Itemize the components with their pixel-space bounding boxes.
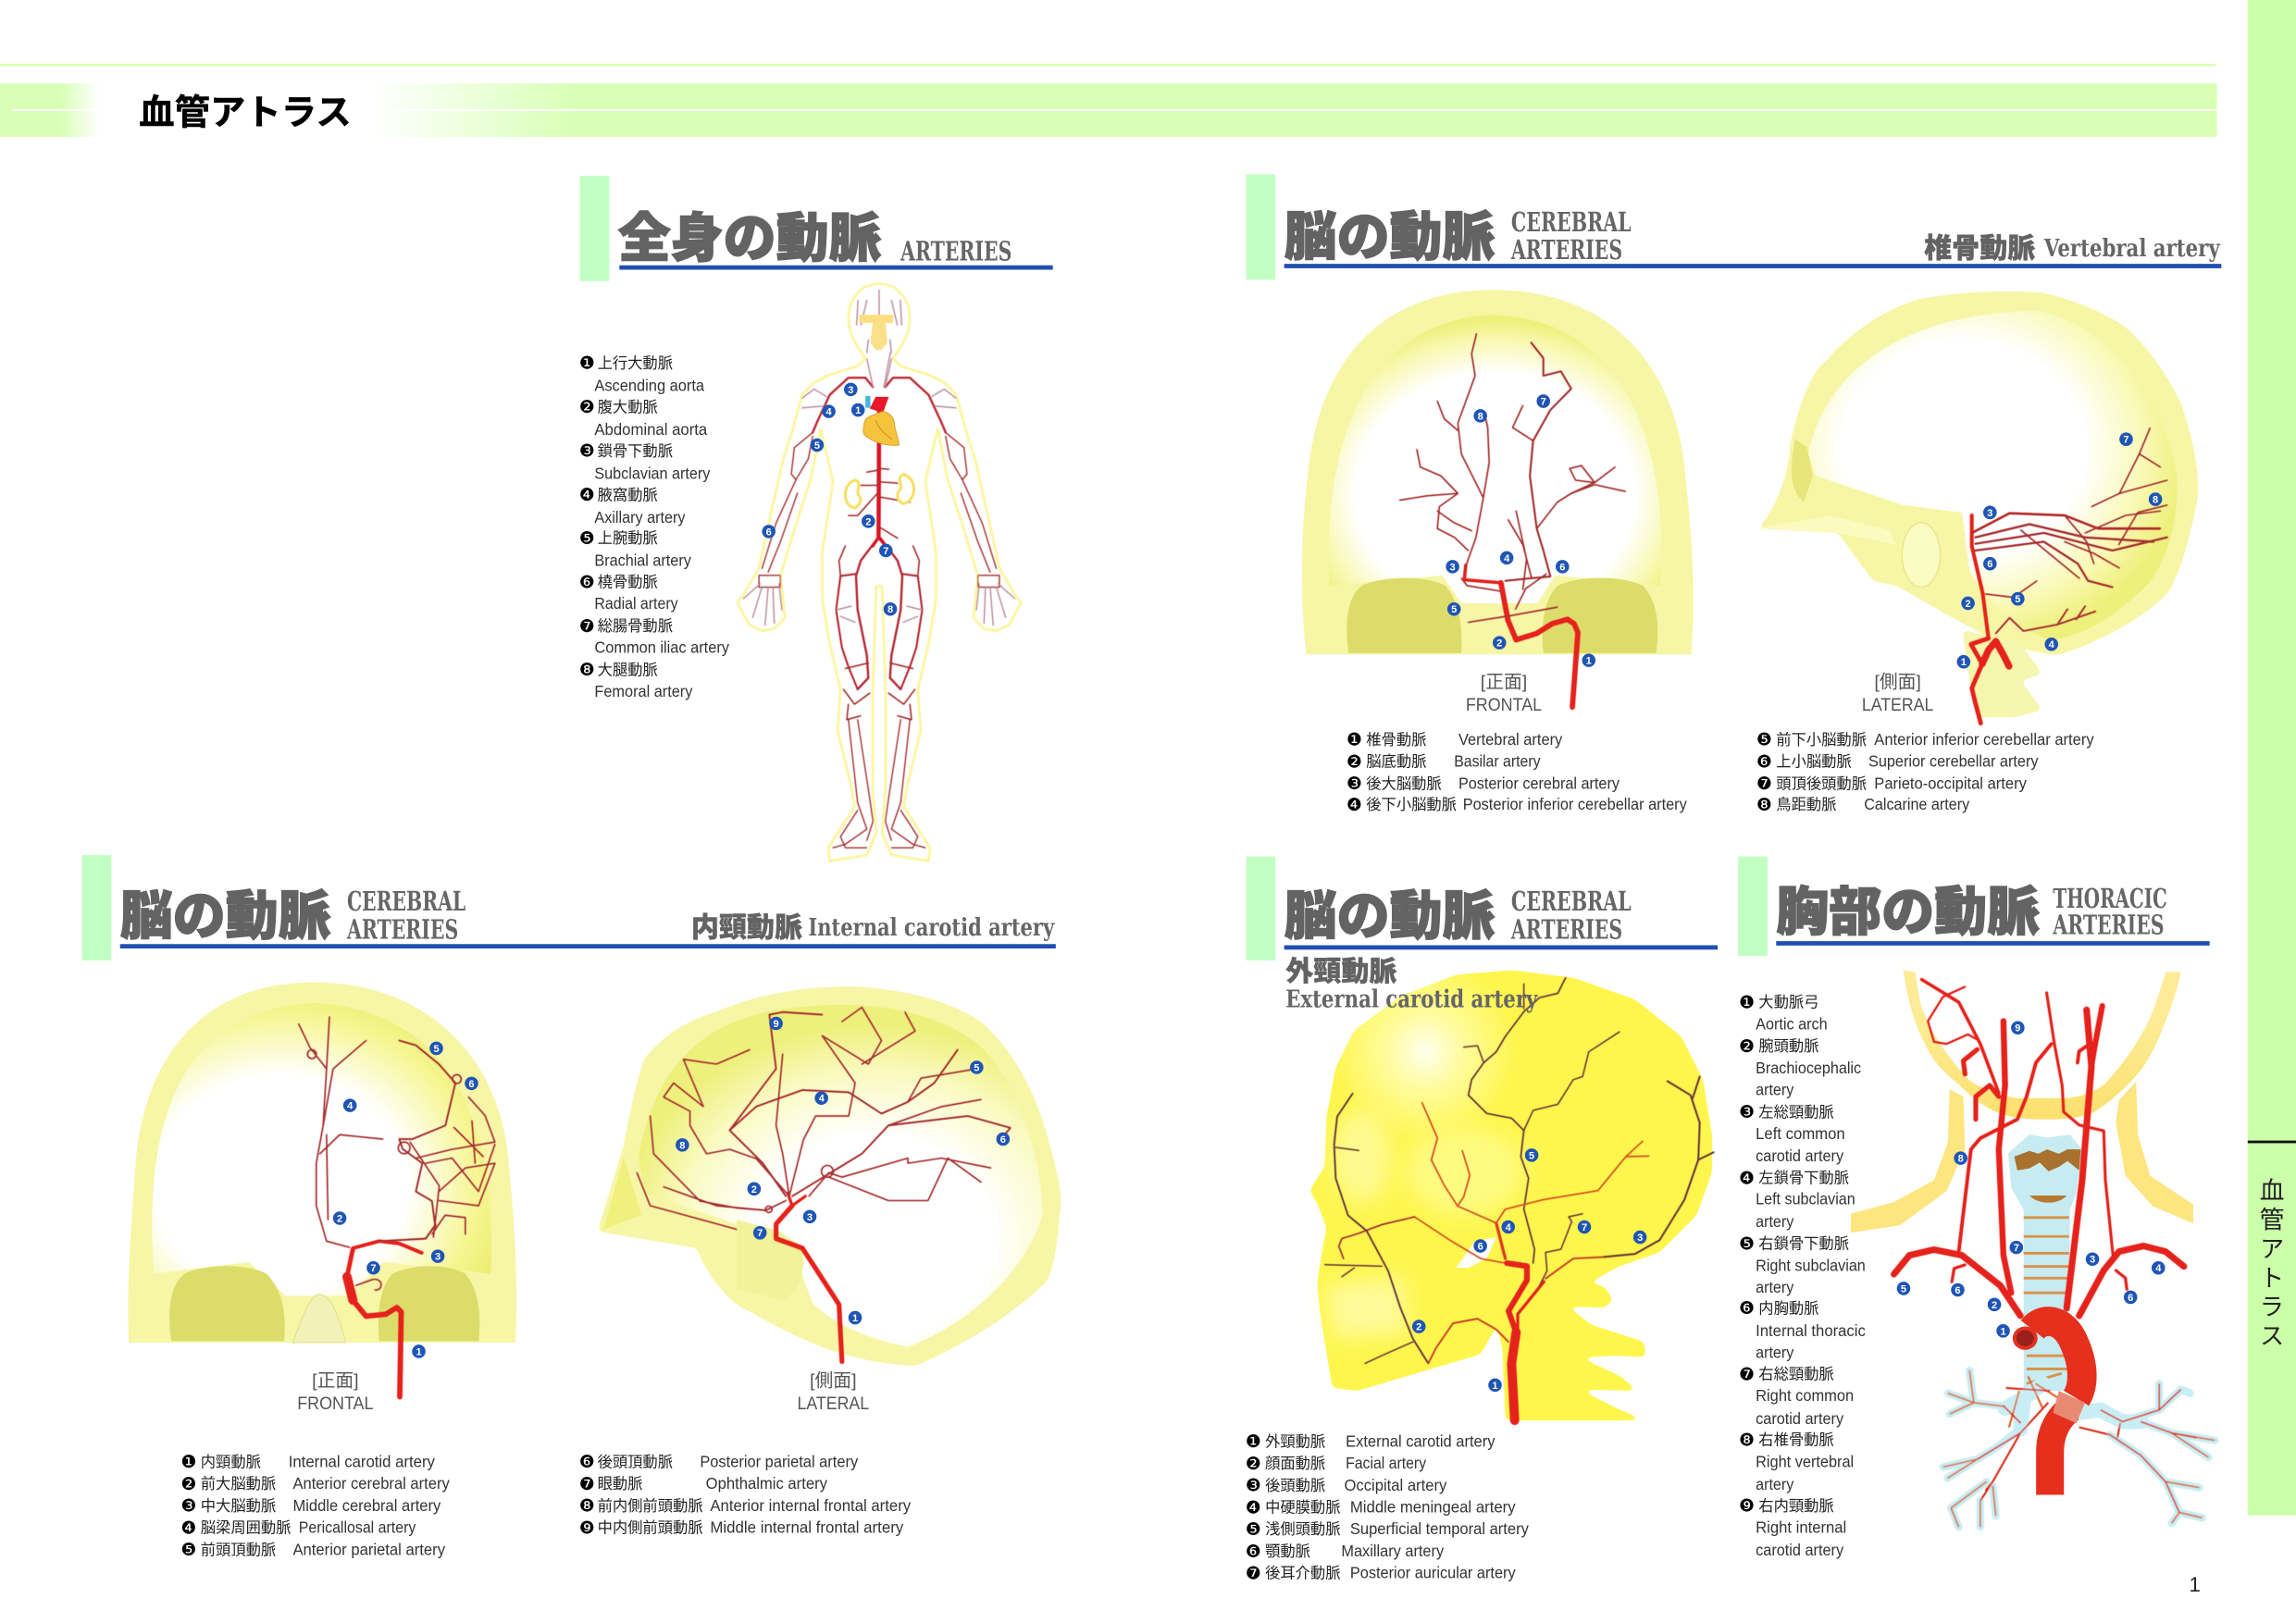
number markers: 5 bbox=[974, 1062, 979, 1073]
side tab label: 血管アトラス bbox=[2256, 1177, 2284, 1352]
legend bbox=[579, 353, 729, 700]
legend: Right subclavian bbox=[1756, 1256, 1866, 1274]
legend: 右内頸動脈 bbox=[1758, 1498, 1834, 1515]
number markers: 8 bbox=[887, 604, 893, 615]
legend: ❹ bbox=[1347, 795, 1362, 815]
legend: 椎骨動脈 bbox=[1366, 732, 1426, 749]
legend: Right vertebral bbox=[1756, 1452, 1854, 1470]
number markers: 2 bbox=[1416, 1322, 1421, 1333]
number markers: 3 bbox=[1987, 508, 1992, 519]
legend: 眼動脈 bbox=[598, 1476, 642, 1493]
legend: Calcarine artery bbox=[1864, 795, 1969, 813]
title: 血管アトラス bbox=[139, 94, 352, 133]
bronchial tree bbox=[1943, 1370, 2215, 1527]
legend: 後頭頂動脈 bbox=[598, 1454, 673, 1470]
legend: 後頭動脈 bbox=[1265, 1478, 1325, 1494]
legend: Anterior inferior cerebellar artery bbox=[1874, 730, 2094, 749]
legend: ❸ bbox=[1347, 774, 1362, 794]
heading block: 脳の動脈 bbox=[1285, 207, 1496, 266]
number markers: 5 bbox=[1901, 1283, 1906, 1295]
legend: ❼ bbox=[579, 1474, 595, 1494]
number markers: 5 bbox=[433, 1044, 440, 1055]
legend: ❷ bbox=[1246, 1454, 1261, 1474]
caption: lateral: LATERAL bbox=[1862, 695, 1933, 715]
kidneys bbox=[845, 480, 861, 508]
number markers: 1 bbox=[2000, 1326, 2006, 1337]
caption: frontal: [正面] bbox=[312, 1370, 359, 1391]
heading block: External carotid artery bbox=[1285, 985, 1538, 1014]
legend bbox=[1739, 992, 1866, 1559]
number markers: 4 bbox=[1506, 1222, 1512, 1233]
caption: frontal: FRONTAL bbox=[297, 1394, 373, 1414]
number markers: 5 bbox=[1529, 1150, 1534, 1161]
number markers: 4 bbox=[2049, 639, 2055, 650]
number markers: 2 bbox=[1992, 1300, 1997, 1311]
number markers bbox=[1412, 1148, 1646, 1392]
number markers: 8 bbox=[2153, 495, 2158, 506]
legend: ❺ bbox=[180, 1540, 196, 1560]
lateral skull bbox=[1758, 291, 2198, 724]
legend: artery bbox=[1756, 1081, 1794, 1099]
legend: 上行大動脈 bbox=[598, 355, 673, 372]
legend: 後耳介動脈 bbox=[1265, 1566, 1341, 1582]
legend: 鎖骨下動脈 bbox=[598, 443, 673, 460]
number markers: 8 bbox=[1478, 411, 1483, 422]
legend: Posterior cerebral artery bbox=[1458, 774, 1620, 792]
number markers: 5 bbox=[1451, 604, 1457, 615]
panel: whole body arteries bbox=[579, 176, 1053, 861]
legend: ❺ bbox=[1756, 730, 1772, 750]
legend: ❶ bbox=[1246, 1431, 1261, 1452]
legend: ❺ bbox=[1739, 1233, 1755, 1254]
legend: 後下小脳動脈 bbox=[1366, 797, 1457, 813]
legend: ❽ bbox=[1756, 795, 1772, 815]
number markers: 4 bbox=[819, 1094, 825, 1105]
legend: ❼ bbox=[1756, 774, 1772, 794]
legend: ❼ bbox=[1739, 1364, 1755, 1384]
legend: 総腸骨動脈 bbox=[598, 618, 673, 635]
legend: 左総頸動脈 bbox=[1758, 1104, 1834, 1121]
legend: Anterior internal frontal artery bbox=[710, 1496, 911, 1515]
legend: Occipital artery bbox=[1345, 1476, 1447, 1494]
legend: ❻ bbox=[1246, 1542, 1261, 1562]
legend: ❷ bbox=[180, 1474, 196, 1494]
legend: Posterior inferior cerebellar artery bbox=[1463, 795, 1687, 813]
legend: Posterior parietal artery bbox=[700, 1452, 858, 1470]
legend: 後大脳動脈 bbox=[1366, 775, 1442, 792]
number markers: 4 bbox=[2155, 1263, 2162, 1274]
number markers: 3 bbox=[1637, 1233, 1643, 1244]
heading block: ARTERIES bbox=[1510, 913, 1622, 945]
aortic arch bbox=[2013, 1321, 2085, 1495]
frontal skull bbox=[1302, 290, 1694, 707]
legend: 腋窩動脈 bbox=[598, 487, 658, 503]
number markers: 9 bbox=[2015, 1023, 2020, 1035]
number markers: 6 bbox=[1000, 1134, 1006, 1146]
legend: Radial artery bbox=[594, 594, 678, 613]
heading block: ARTERIES bbox=[900, 236, 1011, 267]
heading block: 内頸動脈 bbox=[691, 913, 802, 944]
legend: ❻ bbox=[1739, 1298, 1755, 1319]
legend: ❷ bbox=[579, 397, 595, 417]
heading block: ARTERIES bbox=[346, 913, 458, 945]
legend: 腕頭動脈 bbox=[1758, 1038, 1818, 1055]
heading block bbox=[1738, 857, 2210, 956]
legend bbox=[180, 1452, 911, 1560]
number markers: 2 bbox=[337, 1213, 342, 1224]
legend: Middle meningeal artery bbox=[1350, 1498, 1516, 1517]
legend: Middle cerebral artery bbox=[292, 1496, 441, 1515]
legend: Anterior parietal artery bbox=[292, 1540, 445, 1558]
heading block bbox=[82, 855, 1056, 960]
lateral skull bbox=[598, 986, 1061, 1366]
heading block: 椎骨動脈 bbox=[1924, 234, 2035, 265]
legend: Internal thoracic bbox=[1756, 1321, 1866, 1340]
legend: Brachiocephalic bbox=[1756, 1059, 1861, 1077]
number markers: 6 bbox=[1559, 562, 1565, 573]
legend: 中大脳動脈 bbox=[201, 1498, 276, 1515]
legend: artery bbox=[1756, 1212, 1794, 1231]
legend: Right internal bbox=[1756, 1518, 1846, 1537]
number markers: 7 bbox=[370, 1263, 377, 1274]
legend: carotid artery bbox=[1756, 1409, 1843, 1428]
legend: ❶ bbox=[579, 353, 595, 374]
arteries bbox=[1894, 980, 2184, 1316]
caption: frontal bbox=[1466, 673, 1542, 715]
panel: cerebral arteries, vertebral bbox=[1247, 174, 2221, 815]
number markers: 1 bbox=[1492, 1381, 1498, 1392]
number markers: 6 bbox=[766, 527, 772, 538]
number markers bbox=[1957, 432, 2162, 668]
number markers bbox=[1897, 1022, 2166, 1338]
legend: Superficial temporal artery bbox=[1350, 1519, 1529, 1538]
legend: Ophthalmic artery bbox=[706, 1474, 827, 1493]
heart bbox=[863, 396, 900, 445]
legend: ❸ bbox=[1739, 1102, 1755, 1122]
legend: 前大脳動脈 bbox=[201, 1476, 276, 1493]
number markers bbox=[676, 1017, 1010, 1324]
skull illustration bbox=[1309, 970, 1714, 1420]
heading block bbox=[1247, 857, 1718, 1014]
legend: ❸ bbox=[579, 441, 595, 462]
legend: 鳥距動脈 bbox=[1776, 797, 1836, 813]
legend: ❻ bbox=[579, 1452, 595, 1472]
legend: Femoral artery bbox=[594, 682, 693, 700]
legend: ❾ bbox=[579, 1518, 595, 1538]
legend: artery bbox=[1756, 1475, 1794, 1493]
legend: ❺ bbox=[579, 528, 595, 549]
legend: Parieto-occipital artery bbox=[1874, 774, 2027, 792]
legend: 前内側前頭動脈 bbox=[598, 1498, 703, 1515]
legend: ❼ bbox=[1246, 1564, 1261, 1584]
legend: ❻ bbox=[1756, 751, 1772, 772]
legend: 脳梁周囲動脈 bbox=[201, 1520, 291, 1537]
number markers bbox=[1446, 394, 1595, 667]
legend: Pericallosal artery bbox=[299, 1518, 416, 1537]
caption: frontal bbox=[297, 1370, 373, 1414]
legend: ❶ bbox=[180, 1452, 196, 1472]
legend: ❸ bbox=[180, 1496, 196, 1517]
legend: ❷ bbox=[1347, 751, 1362, 772]
number markers: 9 bbox=[774, 1019, 779, 1030]
caption: lateral: [側面] bbox=[1874, 673, 1921, 693]
trachea bbox=[2008, 1134, 2082, 1391]
legend: 大動脈弓 bbox=[1758, 995, 1818, 1011]
legend: ❺ bbox=[1246, 1519, 1261, 1540]
header band bbox=[0, 83, 2217, 137]
heading block: Vertebral artery bbox=[2043, 234, 2220, 263]
heading block: 外頸動脈 bbox=[1285, 957, 1396, 987]
legend: 脳底動脈 bbox=[1366, 754, 1426, 771]
legend: Anterior cerebral artery bbox=[292, 1474, 450, 1493]
legend: Aortic arch bbox=[1756, 1014, 1828, 1033]
number markers: 3 bbox=[1450, 562, 1456, 573]
legend: Internal carotid artery bbox=[289, 1452, 435, 1470]
legend: carotid artery bbox=[1756, 1541, 1843, 1559]
caption: frontal: FRONTAL bbox=[1466, 695, 1542, 715]
number markers: 4 bbox=[825, 407, 832, 418]
legend: ❸ bbox=[1246, 1476, 1261, 1496]
legend: carotid artery bbox=[1756, 1146, 1843, 1165]
legend: artery bbox=[1756, 1344, 1794, 1362]
heading block: CEREBRAL bbox=[347, 886, 465, 917]
number markers bbox=[762, 383, 897, 616]
legend: ❾ bbox=[1739, 1496, 1755, 1517]
legend: 内胸動脈 bbox=[1758, 1300, 1818, 1317]
number markers: 7 bbox=[883, 546, 888, 557]
page number: 1 bbox=[2189, 1573, 2201, 1596]
heading block bbox=[580, 176, 1053, 281]
legend: 頭頂後頭動脈 bbox=[1776, 775, 1867, 792]
legend: ❹ bbox=[1246, 1497, 1261, 1518]
heading block: 全身の動脈 bbox=[618, 209, 882, 268]
legend: ❻ bbox=[579, 572, 595, 592]
heading block bbox=[1247, 174, 2221, 279]
number markers: 1 bbox=[855, 405, 861, 416]
number markers: 3 bbox=[807, 1212, 813, 1223]
legend: 外頸動脈 bbox=[1265, 1433, 1325, 1450]
caption: lateral: [側面] bbox=[810, 1370, 857, 1391]
legend: Middle internal frontal artery bbox=[710, 1518, 904, 1537]
legend: 右鎖骨下動脈 bbox=[1758, 1236, 1849, 1253]
legend: 左鎖骨下動脈 bbox=[1758, 1171, 1849, 1187]
number markers: 8 bbox=[1958, 1154, 1964, 1165]
caption: lateral bbox=[798, 1370, 869, 1414]
legend: 橈骨動脈 bbox=[598, 575, 658, 591]
number markers bbox=[333, 1042, 478, 1358]
legend: 浅側頭動脈 bbox=[1265, 1521, 1341, 1538]
legend: Axillary artery bbox=[594, 508, 686, 527]
number markers: 6 bbox=[468, 1079, 475, 1090]
legend: Brachial artery bbox=[594, 551, 691, 570]
number markers: 7 bbox=[1582, 1222, 1587, 1233]
legend: 大腿動脈 bbox=[598, 662, 658, 678]
legend: ❹ bbox=[579, 485, 595, 505]
number markers: 5 bbox=[814, 440, 820, 452]
caption: lateral: LATERAL bbox=[798, 1394, 869, 1414]
heading block: 脳の動脈 bbox=[120, 887, 331, 947]
legend: Common iliac artery bbox=[594, 638, 729, 657]
legend: ❹ bbox=[1739, 1168, 1755, 1188]
number markers: 7 bbox=[1541, 397, 1546, 408]
panel: cerebral arteries, internal carotid bbox=[82, 855, 1061, 1560]
number markers: 4 bbox=[1504, 553, 1510, 564]
legend: 前下小脳動脈 bbox=[1776, 732, 1867, 749]
caption: lateral bbox=[1862, 673, 1933, 715]
legend: Superior cerebellar artery bbox=[1868, 752, 2039, 771]
legend: 右椎骨動脈 bbox=[1758, 1432, 1834, 1449]
number markers: 2 bbox=[751, 1184, 757, 1196]
legend: 上小脳動脈 bbox=[1776, 754, 1852, 771]
number markers: 2 bbox=[865, 516, 871, 527]
caption: frontal: [正面] bbox=[1481, 673, 1527, 693]
number markers: 2 bbox=[1496, 638, 1502, 650]
number markers: 3 bbox=[2090, 1255, 2095, 1266]
number markers: 4 bbox=[347, 1101, 354, 1112]
heading block: THORACIC bbox=[2053, 883, 2167, 914]
legend: 内頸動脈 bbox=[201, 1454, 261, 1470]
legend: ❽ bbox=[579, 1496, 595, 1517]
legend bbox=[1347, 730, 2094, 815]
number markers: 7 bbox=[757, 1228, 763, 1239]
legend: ❷ bbox=[1739, 1036, 1755, 1057]
number markers: 7 bbox=[2014, 1243, 2019, 1254]
legend: 顎動脈 bbox=[1265, 1543, 1310, 1560]
heading block: CEREBRAL bbox=[1511, 206, 1632, 238]
legend: artery bbox=[1756, 1278, 1794, 1296]
legend: Ascending aorta bbox=[594, 376, 704, 394]
heading block: 脳の動脈 bbox=[1285, 887, 1496, 947]
legend: 右総頸動脈 bbox=[1758, 1367, 1834, 1383]
heading block: ARTERIES bbox=[1510, 234, 1622, 266]
number markers: 1 bbox=[1586, 656, 1592, 667]
number markers: 6 bbox=[1987, 559, 1992, 570]
legend: 腹大動脈 bbox=[598, 399, 658, 415]
legend: Left subclavian bbox=[1756, 1189, 1855, 1208]
number markers: 5 bbox=[2015, 594, 2020, 605]
number markers: 6 bbox=[1955, 1285, 1961, 1296]
body illustration bbox=[738, 283, 1021, 861]
legend: Facial artery bbox=[1346, 1454, 1426, 1472]
number markers: 1 bbox=[1961, 657, 1967, 668]
legend: External carotid artery bbox=[1346, 1431, 1496, 1450]
heading block: CEREBRAL bbox=[1511, 886, 1632, 917]
legend: 前頭頂動脈 bbox=[201, 1542, 276, 1558]
number markers: 8 bbox=[679, 1140, 685, 1151]
panel: thoracic arteries bbox=[1738, 857, 2215, 1559]
legend: 中硬膜動脈 bbox=[1265, 1500, 1341, 1517]
number markers: 1 bbox=[416, 1346, 422, 1357]
number markers: 1 bbox=[852, 1313, 858, 1324]
number markers: 6 bbox=[2128, 1293, 2133, 1304]
number markers: 2 bbox=[1965, 599, 1971, 610]
legend: ❽ bbox=[1739, 1431, 1755, 1451]
legend: ❼ bbox=[579, 616, 595, 637]
thoracic illustration bbox=[1851, 970, 2215, 1527]
legend bbox=[1246, 1431, 1529, 1584]
legend: Left common bbox=[1756, 1124, 1845, 1143]
legend: Vertebral artery bbox=[1458, 730, 1563, 749]
legend: 顔面動脈 bbox=[1265, 1456, 1325, 1472]
legend: Maxillary artery bbox=[1341, 1542, 1444, 1560]
number markers: 3 bbox=[848, 385, 853, 396]
legend: ❽ bbox=[579, 660, 595, 680]
legend: ❶ bbox=[1347, 730, 1362, 750]
legend: ❹ bbox=[180, 1518, 196, 1538]
heading block: ARTERIES bbox=[2053, 910, 2165, 941]
legend: 中内側前頭動脈 bbox=[598, 1520, 703, 1537]
number markers: 7 bbox=[2123, 435, 2129, 446]
side tab bbox=[2248, 0, 2296, 1516]
clavicle bands bbox=[1851, 970, 2193, 1233]
legend: ❶ bbox=[1739, 992, 1755, 1012]
legend: 上腕動脈 bbox=[598, 530, 658, 547]
heading block: Internal carotid artery bbox=[808, 913, 1055, 942]
header line bbox=[0, 64, 2215, 66]
legend: Subclavian artery bbox=[594, 464, 711, 482]
heading block: 胸部の動脈 bbox=[1776, 883, 2040, 942]
number markers: 6 bbox=[1478, 1241, 1483, 1252]
number markers: 3 bbox=[435, 1252, 441, 1263]
panel: cerebral arteries, external carotid bbox=[1246, 857, 1718, 1584]
legend: Basilar artery bbox=[1454, 752, 1541, 771]
frontal skull bbox=[128, 983, 516, 1397]
legend: Right common bbox=[1756, 1386, 1854, 1405]
legend: Abdominal aorta bbox=[594, 420, 708, 439]
legend: Posterior auricular artery bbox=[1350, 1564, 1516, 1582]
